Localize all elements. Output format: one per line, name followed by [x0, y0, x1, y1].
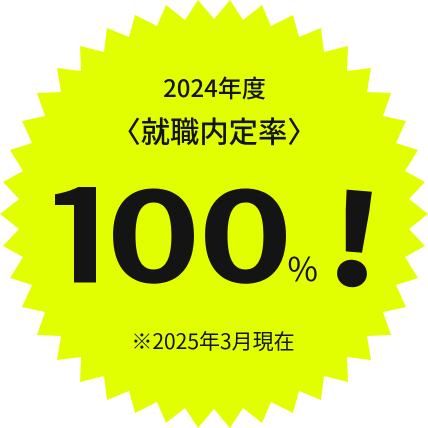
- subtitle: employment offer rate: 〈就職内定率〉: [111, 110, 317, 152]
- percent sign: %: [288, 243, 318, 291]
- digit one: 1: [35, 132, 132, 321]
- big number 100: [55, 187, 286, 284]
- second zero: 0: [198, 139, 293, 318]
- exclamation mark: !: [320, 141, 391, 324]
- date note: ※2025年3月現在: [131, 326, 295, 356]
- first zero: 0: [106, 139, 201, 318]
- year heading: 2024年度: [163, 69, 266, 104]
